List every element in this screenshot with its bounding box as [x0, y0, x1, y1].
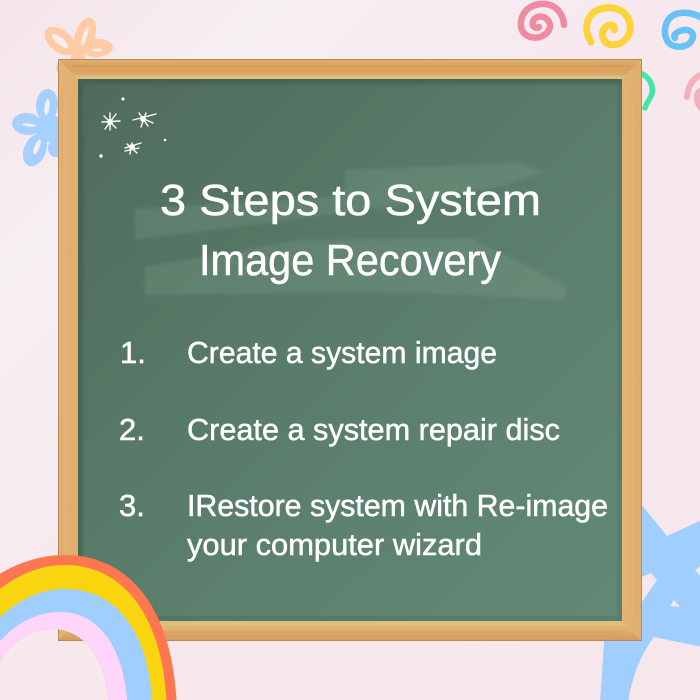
- step 1: Create a system image: [187, 335, 497, 370]
- icon: peach flower: [39, 15, 114, 75]
- icon: blue swirl: [665, 13, 700, 47]
- title: 3 Steps to System: [160, 176, 541, 225]
- frame: wooden border: [58, 59, 642, 641]
- step 3: 3.: [119, 488, 145, 523]
- step 1: 1.: [120, 335, 146, 370]
- star two: [133, 113, 156, 127]
- icon: blue star: [600, 498, 700, 700]
- icon: chalk stars: [99, 97, 166, 158]
- step 3: IRestore system with Re-image: [187, 488, 608, 523]
- panel: green board: [78, 79, 622, 621]
- icon: blue flower: [11, 88, 64, 170]
- title: Image Recovery: [199, 236, 501, 285]
- title: [160, 176, 541, 285]
- icon: faint pink swirl: [687, 74, 700, 109]
- step list: [119, 335, 608, 562]
- icon: green swirl: [640, 73, 652, 108]
- star three: [125, 143, 141, 154]
- star one: [102, 113, 120, 130]
- step 2: 2.: [119, 412, 145, 447]
- chalk smudges: [135, 163, 566, 300]
- step 2: Create a system repair disc: [187, 412, 560, 447]
- icon: yellow swirl: [587, 8, 630, 45]
- chalkboard frame: [58, 59, 642, 641]
- icon: rainbow: [0, 555, 177, 700]
- icon: pink swirl: [521, 4, 564, 38]
- step 3: your computer wizard: [187, 527, 482, 562]
- step 3: [119, 488, 608, 562]
